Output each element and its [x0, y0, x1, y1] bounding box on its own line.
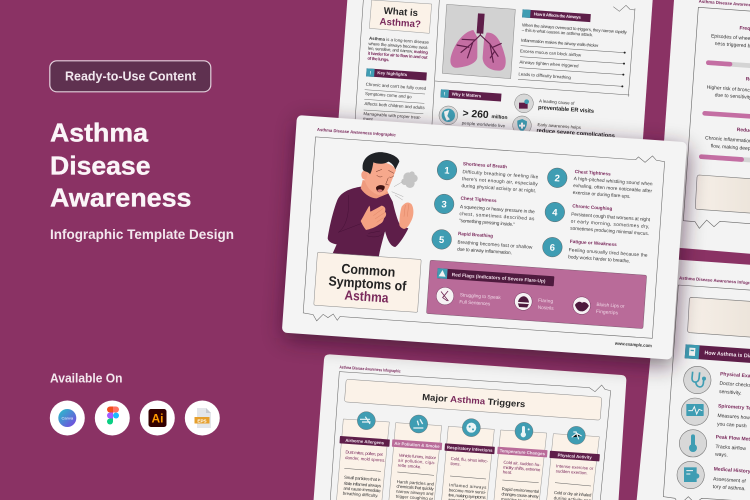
symptom 3: [433, 194, 536, 229]
card frame: [683, 7, 750, 228]
column: respiratory infections: tive, making symptoms: [448, 492, 486, 500]
sweater: [328, 187, 408, 258]
label box: Common Symptoms of Asthma: Symptoms of: [328, 273, 407, 294]
symptom 6: [542, 237, 649, 266]
column: air pollution and smoke: Air Pollution & Smoke: [394, 441, 440, 449]
banner: Key highlights: !: [369, 70, 372, 75]
key highlight list: Symptoms come and go: [365, 91, 412, 99]
symptom 5: Rapid Breathing: [458, 231, 493, 238]
flag: speaking difficulty: [436, 287, 502, 309]
footer url: www.example.com: [614, 341, 652, 348]
panel: top infographic card "What is Asthma?": [337, 0, 653, 143]
column: temperature changes: Rapid environmental: [502, 486, 539, 494]
title: Asthma: [50, 118, 149, 148]
title: Disease: [50, 150, 150, 180]
icon: EPS file: [185, 400, 220, 436]
panel: right top infographic card: [657, 0, 750, 254]
label box: Common Symptoms of Asthma: Asthma: [344, 288, 389, 306]
symptom 2: [546, 167, 654, 201]
symptom 6: 6: [549, 242, 555, 254]
face: [363, 162, 396, 195]
symptom 6: body works harder to breathe.: [568, 254, 630, 265]
icon: Adobe Illustrator: Ai: [152, 412, 164, 426]
airway effects list: – this is what causes an asthma attack.: [522, 27, 593, 37]
eyes and mouth: [376, 169, 394, 185]
statistic: 260 million: > 260: [462, 108, 489, 121]
symptom 4: [544, 202, 651, 237]
column: air pollution and smoke: chemicals that quickly: [396, 484, 435, 491]
shadow of main card: [283, 121, 689, 366]
definition text: Asthma is a long-term disease: [369, 36, 430, 45]
airway effects list: Airways tighten when triggered: [519, 59, 579, 68]
column: airborne allergens: and cause immediate: [343, 486, 381, 493]
symptom 1: during physical activity or at night.: [461, 183, 536, 194]
subtitle: Infographic Template Design: [50, 227, 234, 242]
symptom 6: Feeling unusually tired because the: [569, 247, 648, 259]
definition text: it harder for air to flow in and out: [368, 51, 428, 60]
symptom 4: sometimes producing minimal mucus.: [570, 226, 649, 237]
symptom 5: 5: [439, 235, 445, 246]
column: temperature changes: Cold air, sudden hu-: [503, 460, 541, 467]
card frame: [330, 372, 611, 500]
icon: ER building: [515, 94, 533, 113]
item: medical history: Medical History: [714, 466, 750, 475]
symptom 2: Chest Tightness: [575, 169, 611, 177]
badge: Ready-to-Use Content: Ready-to-Use Content: [65, 70, 197, 84]
banner: Why It Matters: !: [444, 91, 446, 96]
item: spirometry test: [681, 398, 750, 429]
symptom 5: [431, 229, 534, 258]
statistic: 260 million: people worldwide live: [462, 120, 506, 128]
column: air pollution and smoke: narrow airways and: [396, 489, 434, 496]
flag: flaring nostrils: Nostrils: [537, 305, 554, 312]
item: physical exam: [684, 366, 750, 397]
column: physical activity: sudden exertion.: [556, 468, 588, 476]
callout box: [695, 175, 750, 213]
banner: red flags title: Red Flags (Indicators of Severe Flare-Up): [451, 272, 546, 285]
key highlight list: ment: [363, 116, 374, 122]
illustration: man coughing holding chest: [328, 152, 418, 258]
panel: Major Asthma Triggers card: [313, 354, 626, 500]
symptoms list: Asthma Disease Awareness Infographic: [317, 127, 397, 137]
symptom 3: A squeezing or heavy pressure in the: [460, 204, 535, 215]
airway effects list: When the airways overreact to triggers, they narrow rapidly: [522, 22, 628, 35]
item: peak flow meter: ways.: [715, 452, 728, 459]
lungs panel: [442, 4, 515, 79]
icon: Adobe Illustrator: [140, 400, 175, 436]
flag: flaring nostrils: [514, 292, 555, 313]
column: airborne allergens: breathing difficulty.: [343, 491, 379, 498]
column: airborne allergens: ritate inflamed airways: [344, 481, 381, 488]
banner: Why It Matters: Why It Matters: [452, 91, 482, 99]
column: airborne allergens: Small particles that ir-: [344, 475, 382, 482]
flag: speaking difficulty: Full Sentences: [459, 299, 491, 307]
card frame: [663, 285, 750, 500]
symptom 4: Chronic Coughing: [572, 203, 613, 211]
definition text: [367, 36, 430, 62]
text: reduce severe complications: reduce severe complications: [536, 128, 615, 139]
banner: Key highlights: [366, 68, 427, 81]
item: medical history: tory of asthma.: [713, 484, 746, 492]
frame: [303, 132, 665, 344]
airway effects list: [518, 22, 628, 87]
column: physical activity: [546, 426, 600, 500]
title: [50, 118, 192, 213]
symptoms list: [303, 127, 665, 348]
column: airborne allergens: Dust mites, pollen, pet: [345, 449, 384, 457]
column: respiratory infections: [441, 419, 495, 500]
left hand on chest: [361, 206, 386, 230]
text: preventable ER visits: preventable ER visits: [538, 105, 594, 115]
column: temperature changes: midity shifts, extreme: [503, 465, 541, 472]
panel: right bottom infographic card: [637, 258, 750, 500]
stat: respiratory risk: [705, 76, 750, 117]
title: Major Asthma Triggers: [422, 392, 526, 409]
right hand: [399, 202, 413, 229]
heading: Available On: Available On: [50, 372, 122, 386]
icon: Canva: Canva: [62, 416, 74, 420]
flag: bluish lips: Fingertips: [596, 309, 619, 316]
symptom 1: Difficulty breathing or feeling like: [462, 169, 539, 180]
banner: How it Affects the Airways: How it Affects the Airways: [534, 11, 582, 20]
column: airborne allergens: dander, mold spores.: [345, 455, 386, 463]
symptom 4: or early morning, sometimes dry,: [571, 219, 650, 230]
heading box: [345, 379, 602, 420]
symptom 3: 3: [441, 199, 447, 211]
panel: main card Common Symptoms of Asthma: [282, 115, 687, 360]
heading box: What is Asthma?: What is: [383, 6, 418, 19]
statistic: 260 million: million: [491, 114, 508, 121]
column: airborne allergens: [336, 412, 390, 500]
icon: EPS file: EPS: [197, 418, 207, 423]
column: temperature changes: Temperature Changes: [500, 448, 546, 456]
text: preventable ER visits: [538, 98, 594, 115]
card header: Asthma Disease Awareness Infographic: [339, 364, 401, 374]
text: preventable ER visits: A leading cause of: [539, 98, 575, 106]
banner: red flags title: [437, 268, 554, 286]
column: respiratory infections: become more sensi-: [449, 487, 487, 495]
item: medical history: Assessment of: [713, 476, 747, 485]
definition text: where the airways become swol-: [368, 41, 429, 50]
banner: How Asthma is Diagnosed: [685, 344, 750, 364]
column: temperature changes: [493, 422, 548, 500]
key highlight list: Chronic and can't be fully cured: [366, 82, 427, 91]
symptom 3: "something pressing inside.": [459, 218, 515, 228]
symptom 5: due to airway inflammation.: [457, 246, 512, 256]
symptom 1: 1: [444, 165, 451, 177]
airway effects list: Leads to difficulty breathing: [518, 71, 572, 80]
column: air pollution and smoke: Vehicle fumes, indoor: [399, 453, 437, 460]
text: reduce severe complications: Early awareness helps: [537, 122, 581, 130]
column: air pollution and smoke: air pollution, ciga-: [398, 458, 436, 465]
column: air pollution and smoke: Harsh particles and: [397, 479, 435, 487]
symptom 1: [436, 159, 540, 194]
column: air pollution and smoke: rette smoke.: [398, 463, 422, 469]
symptom 3: chest, sometimes described as: [459, 211, 535, 222]
symptom 6: Fatigue or Weakness: [570, 239, 617, 247]
column: physical activity: Physical Activity: [557, 453, 593, 460]
item: spirometry test: you can push: [717, 421, 747, 429]
item: peak flow meter: [679, 430, 750, 459]
stat: reduced airflow: [701, 127, 750, 160]
icon: Figma: [95, 400, 130, 436]
icon: shield: [513, 116, 531, 135]
symptom 1: there's not enough air, especially: [462, 176, 539, 187]
flag: bluish lips: Bluish Lips or: [596, 302, 625, 310]
symptom 4: 4: [552, 207, 559, 219]
symptom 2: exhaling, often more noticeable after: [573, 183, 653, 194]
icon: lungs: [450, 13, 506, 71]
key highlight list: [363, 82, 427, 122]
panel: red flags: [426, 260, 647, 329]
column: temperature changes: changes cause airway: [501, 491, 540, 499]
banner: How it Affects the Airways: [522, 9, 591, 22]
label box: Common Symptoms of Asthma: [314, 252, 421, 312]
column: respiratory infections: tions.: [450, 461, 461, 467]
column: physical activity: Intense exercise or: [556, 463, 594, 471]
stat: frequent attacks: [708, 25, 750, 66]
symptom 2: 2: [554, 173, 560, 184]
symptom 2: A high-pitched whistling sound when: [574, 176, 653, 187]
flag: speaking difficulty: Struggling to Speak: [460, 292, 502, 301]
column: respiratory infections: Cold, flu, sinus infec-: [451, 456, 489, 464]
heading box: What is Asthma?: [369, 0, 432, 33]
banner: Key highlights: Key highlights: [377, 70, 408, 77]
symptom 4: Persistent cough that worsens at night: [571, 212, 651, 223]
symptom 5: Breathing becomes fast or shallow: [457, 240, 533, 251]
breath cloud: [401, 171, 418, 188]
item: physical exam: sensitivity.: [719, 389, 742, 397]
key highlight list: Affects both children and adults: [364, 101, 425, 110]
column: temperature changes: heat.: [503, 469, 513, 475]
key highlight list: Manageable with proper treat-: [363, 111, 422, 120]
neck: [361, 180, 388, 198]
airway effects list: Inflammation makes the airway walls thicker: [521, 38, 599, 48]
column: physical activity: Cold or dry air inhaled: [554, 490, 592, 498]
hair: [363, 152, 399, 174]
badge: Ready-to-Use Content: [50, 61, 211, 92]
column: air pollution and smoke: [388, 415, 442, 500]
definition text: len, sensitive, and narrow, making: [368, 46, 428, 55]
item: spirometry test: Measures how: [717, 413, 750, 421]
item: peak flow meter: Tracks airflow: [715, 444, 746, 452]
column: airborne allergens: Airborne Allergens: [345, 438, 385, 445]
airway effects list: Excess mucus can block airflow: [520, 48, 582, 58]
definition text: of the lungs.: [367, 56, 390, 62]
text: reduce severe complications: [536, 122, 615, 139]
flag: flaring nostrils: Flaring: [538, 298, 554, 305]
column: respiratory infections: Inflamed airways: [449, 482, 487, 490]
icon: globe: [439, 106, 458, 125]
icon: Canva: [50, 400, 85, 436]
symptom 3: Chest Tightness: [460, 196, 497, 203]
item: medical history: [677, 461, 750, 492]
banner: Why It Matters: [440, 89, 502, 102]
title: Awareness: [50, 183, 192, 213]
symptom 2: exercise or during flare-ups.: [573, 190, 631, 200]
heading box: [688, 297, 750, 337]
heading box: What is Asthma?: Asthma?: [379, 17, 421, 30]
statistic: 260 million: [462, 108, 508, 128]
flag: bluish lips: [572, 296, 625, 317]
label box: Common Symptoms of Asthma: Common: [341, 261, 396, 280]
symptom 1: Shortness of Breath: [463, 161, 507, 169]
column: respiratory infections: Respiratory Infections: [447, 445, 493, 453]
